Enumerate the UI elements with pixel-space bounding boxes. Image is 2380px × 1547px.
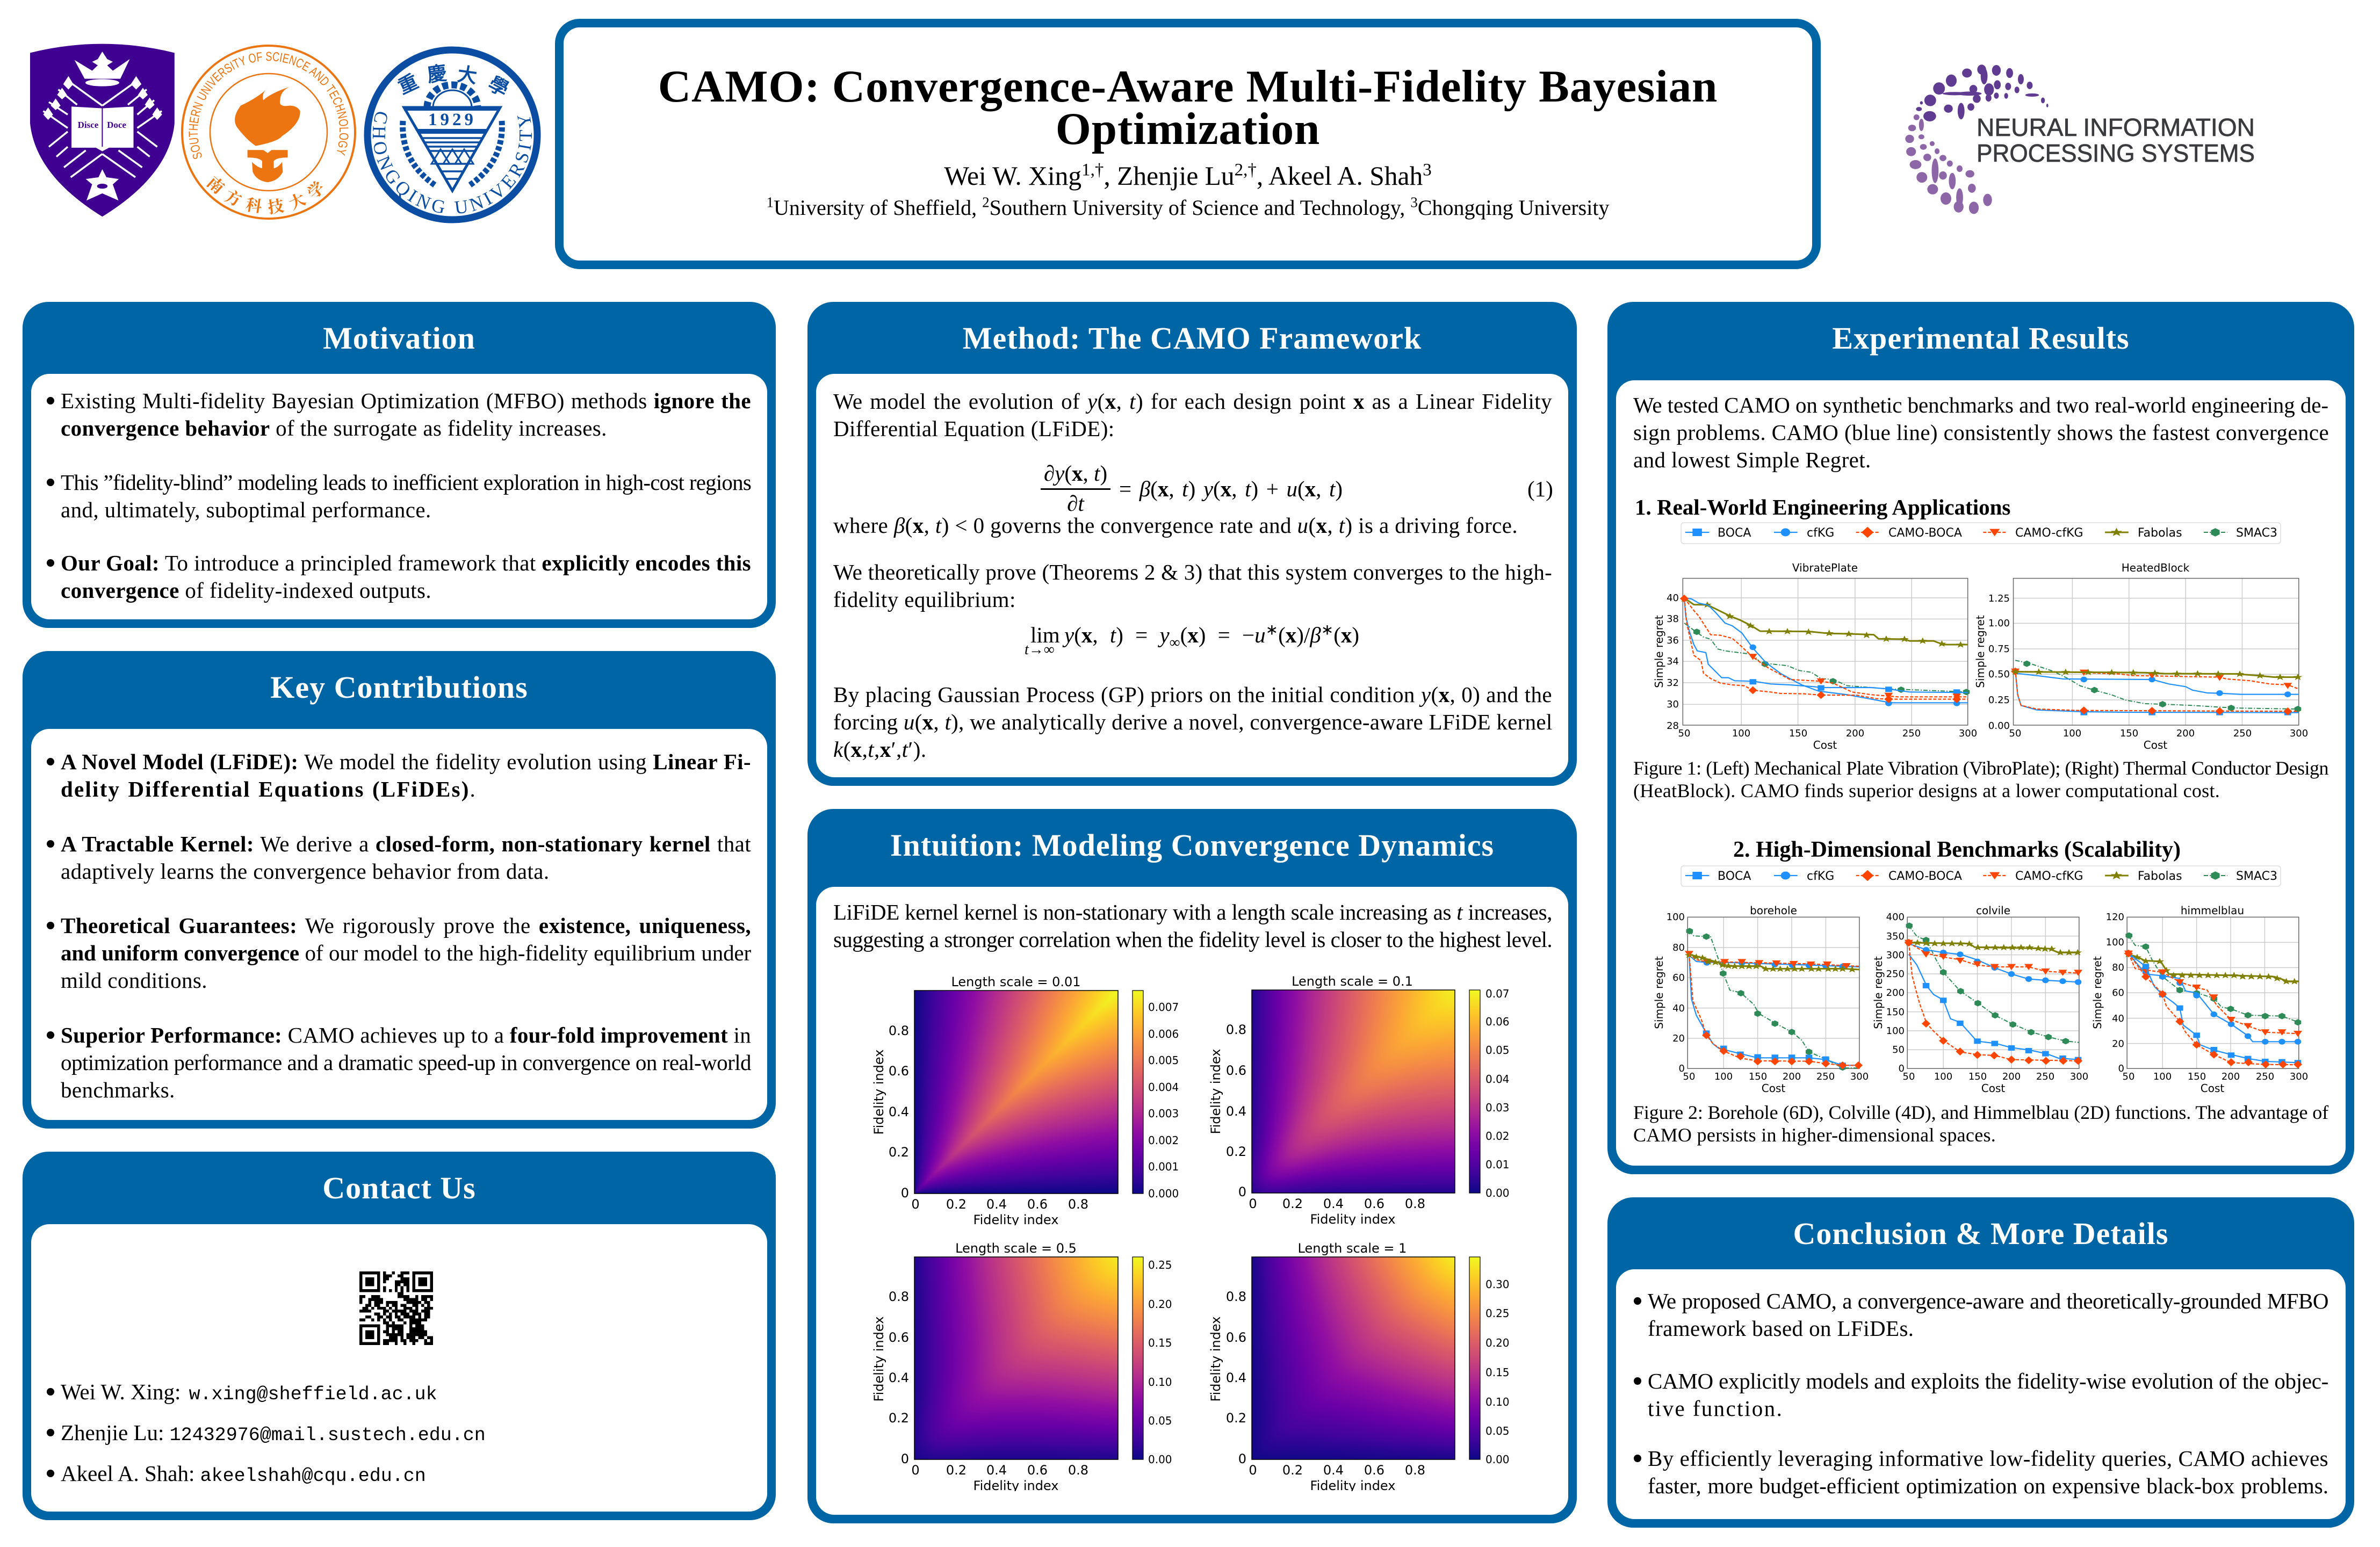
heatmap: length scale 0.5: Fidelity index — [973, 1478, 1058, 1493]
text: tractable kernel: adaptively learns the convergence behavior from data. — [61, 859, 550, 884]
text: our goal: convergence of fidelity-indexed outputs. — [61, 578, 431, 603]
chart: HeatedBlock — [1974, 561, 2308, 751]
heatmap: length scale 0.5: 0 — [911, 1463, 920, 1478]
text: Zhenjie Lu: Zhenjie Lu: 12432976@mail.sustech.edu.cn — [61, 1420, 486, 1446]
chart: VibratePlate: 150 — [1789, 728, 1807, 739]
heatmap: length scale 0.01 — [874, 977, 1179, 1225]
text: kernel intuition — [833, 899, 1552, 953]
heatmap: length scale 0.5: Fidelity index — [871, 1317, 886, 1401]
heatmap: length scale 0.5: 0.4 — [986, 1463, 1007, 1478]
title: CAMO: Convergence-Aware Multi-Fidelity Bayesian — [658, 61, 1718, 112]
legend: CAMO-BOCA — [1888, 526, 1962, 540]
heatmap: length scale 1: Fidelity index — [1310, 1478, 1395, 1493]
heatmap: length scale 0.1: 0.03 — [1485, 1101, 1510, 1114]
chart: colvile: 150 — [1968, 1071, 1987, 1082]
chart: figure 2 — [1617, 859, 2348, 1096]
heatmap: length scale 0.5: 0.10 — [1148, 1376, 1172, 1389]
chart: VibratePlate: 32 — [1667, 677, 1679, 689]
chart: HeatedBlock: Simple regret — [1974, 615, 1987, 688]
chart: borehole: 150 — [1749, 1071, 1767, 1082]
chart: colvile: 200 — [2002, 1071, 2021, 1082]
heatmap: length scale 0.5: 0.8 — [1068, 1463, 1088, 1478]
chart: himmelblau: himmelblau — [2181, 904, 2244, 917]
chart: himmelblau: 20 — [2112, 1038, 2124, 1050]
equation 1: (1) — [1527, 476, 1553, 501]
heatmap: length scale 0.1: 0 — [1249, 1196, 1257, 1211]
heatmap: length scale 0.1: 0.05 — [1485, 1044, 1510, 1057]
heatmap: length scale 0.1: 0.4 — [1226, 1104, 1246, 1119]
chart: VibratePlate: 200 — [1846, 728, 1864, 739]
chart: heatmap grid — [871, 974, 1510, 1493]
heatmap: length scale 0.5: 0.2 — [946, 1463, 967, 1478]
chart: colvile: 50 — [1903, 1071, 1915, 1082]
chart: himmelblau: 80 — [2112, 962, 2124, 973]
heading: conclusion: Conclusion & More Details — [1793, 1216, 2168, 1251]
logo: Southern University of Science and Technology: SOUTHERN UNIVERSITY OF SCIENCE AND TECHNOLOGY — [189, 52, 348, 159]
text: gaussian process: k(x,t,x′,t′). — [833, 737, 926, 762]
caption: figure 2: Figure 2: Borehole (6D), Colville (4D), and Himmelblau (2D) functions. The advantage of — [1633, 1102, 2328, 1123]
text: novel model — [47, 749, 751, 801]
chart: colvile: 300 — [1886, 950, 1905, 961]
text: novel model: delity Differential Equations (LFiDEs). — [61, 777, 477, 801]
chart: himmelblau: 200 — [2222, 1071, 2240, 1082]
chart: HeatedBlock: 1.00 — [1988, 618, 2010, 629]
chart: himmelblau: 60 — [2112, 987, 2124, 999]
chart: colvile: 200 — [1886, 987, 1905, 999]
heatmap: length scale 0.1: 0.4 — [1323, 1196, 1344, 1211]
chart: borehole: 20 — [1672, 1033, 1685, 1044]
text: efficiently leveraging: faster, more budget-efficient optimization on expensive black-box problems. — [1648, 1473, 2328, 1498]
heatmap: length scale 0.5: 0 — [901, 1451, 909, 1466]
text: efficiently leveraging — [1648, 1445, 2328, 1500]
heatmap: length scale 0.01: 0.000 — [1148, 1187, 1179, 1200]
chart: borehole: 200 — [1783, 1071, 1801, 1082]
text: proposed CAMO: framework based on LFiDEs. — [1648, 1316, 1914, 1341]
heatmap: length scale 0.01: 0.006 — [1148, 1028, 1179, 1040]
heatmap: length scale 0.01: 0.003 — [1148, 1107, 1179, 1120]
heatmap: length scale 0.1: 0 — [1238, 1184, 1246, 1199]
heading: method: Method: The CAMO Framework — [963, 321, 1422, 356]
chart: colvile: Simple regret — [1872, 956, 1885, 1029]
heatmap: length scale 0.01: Length scale = 0.01 — [951, 974, 1081, 989]
chart: VibratePlate: 300 — [1959, 728, 1977, 739]
logo: Chongqing University: CHONGQING UNIVERSITY — [373, 112, 532, 214]
heatmap: length scale 1: 0.30 — [1485, 1278, 1510, 1291]
chart: himmelblau: Simple regret — [2091, 956, 2104, 1029]
caption: figure 2: CAMO persists in higher-dimensional spaces. — [1633, 1124, 1996, 1146]
text: Akeel A. Shah: Akeel A. Shah: akeelshah@cqu.edu.cn — [61, 1461, 426, 1487]
heatmap: length scale 1 — [1210, 1243, 1509, 1491]
chart: HeatedBlock: 1.25 — [1988, 593, 2010, 604]
text: kernel intuition: suggesting a stronger correlation when the fidelity level is closer to the highest level. — [833, 927, 1552, 952]
chart: borehole: 60 — [1672, 972, 1685, 984]
heatmap: length scale 1: 0.8 — [1405, 1463, 1425, 1478]
heatmap: length scale 0.1: Length scale = 0.1 — [1292, 974, 1413, 989]
chart: HeatedBlock: 300 — [2290, 728, 2308, 739]
text: proposed CAMO: We proposed CAMO, a convergence-aware and theoretically-grounded MFBO — [1648, 1289, 2328, 1313]
icon: QR code — [359, 1271, 433, 1345]
heatmap: length scale 1: Fidelity index — [1208, 1317, 1223, 1401]
heading: motivation: Motivation — [323, 321, 475, 356]
legend: CAMO-BOCA — [1888, 870, 1962, 883]
heatmap: length scale 0.1: 0.01 — [1485, 1158, 1510, 1171]
logo: Chongqing University: 慶 — [426, 62, 448, 86]
chart: HeatedBlock: 50 — [2009, 728, 2021, 739]
panel: key contributions — [23, 651, 776, 1129]
title: Optimization — [1056, 104, 1320, 154]
heatmap: length scale 0.1 — [1210, 975, 1509, 1225]
chart: borehole: 300 — [1850, 1071, 1869, 1082]
text: where beta: where β(x, t) < 0 governs the convergence rate and u(x, t) is a driving force. — [833, 513, 1518, 538]
chart: VibratePlate — [1653, 561, 1977, 751]
chart: VibratePlate: 250 — [1902, 728, 1921, 739]
heatmap: length scale 1: 0.05 — [1485, 1425, 1510, 1437]
logo: University of Sheffield shield: Doce — [107, 120, 126, 130]
text: existing methods: Existing Multi-fidelity Bayesian Optimization (MFBO) methods ignore the — [61, 388, 751, 413]
chart: colvile: 150 — [1886, 1007, 1905, 1018]
caption: figure 1: (HeatBlock). CAMO finds superior designs at a lower computational cost. — [1633, 780, 2220, 801]
caption: figure 2 — [1633, 1101, 2328, 1146]
heatmap: length scale 0.5: 0.15 — [1148, 1336, 1172, 1349]
heatmap: length scale 0.01: 0.002 — [1148, 1134, 1179, 1147]
heatmap: length scale 0.01: Fidelity index — [871, 1050, 886, 1134]
text: gaussian process: forcing u(x, t), we analytically derive a novel, convergence-aware LFiDE kernel — [833, 710, 1553, 734]
chart: HeatedBlock: HeatedBlock — [2122, 561, 2190, 574]
heatmap: length scale 1: 0.6 — [1364, 1463, 1384, 1478]
chart: himmelblau: 100 — [2153, 1071, 2172, 1082]
text: model intro: Differential Equation (LFiDE): — [833, 416, 1115, 441]
chart: colvile: 100 — [1934, 1071, 1952, 1082]
chart: borehole: 250 — [1816, 1071, 1835, 1082]
chart: himmelblau: 50 — [2123, 1071, 2134, 1082]
text: theoretical guarantees: Theoretical Guarantees: We rigorously prove the existence, uniqueness, — [61, 913, 751, 938]
chart: HeatedBlock: 0.25 — [1988, 695, 2010, 706]
legend — [1681, 866, 2281, 886]
heading: key contributions: Key Contributions — [270, 670, 528, 705]
heatmap: length scale 0.01: 0.007 — [1148, 1001, 1179, 1014]
text: superior performance — [61, 1022, 751, 1104]
chart: HeatedBlock: 0.50 — [1988, 669, 2010, 680]
text: explicitly models — [1648, 1368, 2328, 1422]
heatmap: length scale 0.1: 0.8 — [1226, 1022, 1246, 1037]
chart: colvile — [1872, 904, 2088, 1095]
heatmap: length scale 0.01: 0.2 — [946, 1197, 967, 1212]
heatmap: length scale 0.01: 0.2 — [889, 1145, 909, 1160]
chart: HeatedBlock: 100 — [2063, 728, 2081, 739]
heatmap: length scale 1: 0.8 — [1226, 1289, 1246, 1304]
equation 2: lim — [1030, 623, 1060, 647]
text: existing methods: convergence behavior of the surrogate as fidelity increases. — [61, 416, 607, 440]
logo: Neural Information Processing Systems — [1905, 64, 2255, 214]
text: existing methods — [47, 388, 751, 440]
chart: borehole: Cost — [1762, 1082, 1785, 1095]
chart: colvile: 100 — [1886, 1025, 1905, 1037]
text: superior performance: benchmarks. — [61, 1078, 175, 1102]
equation 2: y(x, t) = y∞(x) = −u∗(x)/β∗(x) — [1064, 621, 1359, 651]
chart: borehole: Simple regret — [1653, 956, 1665, 1029]
chart: HeatedBlock: 250 — [2233, 728, 2252, 739]
legend: Fabolas — [2138, 870, 2182, 883]
chart: borehole — [1653, 904, 1869, 1095]
equation 1: ∂t — [1067, 491, 1084, 516]
chart: himmelblau: 0 — [2118, 1063, 2124, 1074]
legend: CAMO-cfKG — [2015, 526, 2083, 540]
heading: high-dimensional benchmarks: 2. High-Dimensional Benchmarks (Scalability) — [1733, 837, 2181, 862]
text: results intro: We tested CAMO on synthetic benchmarks and two real-world engineering de- — [1633, 393, 2328, 417]
chart: VibratePlate: Simple regret — [1653, 615, 1665, 688]
affiliations: 1University of Sheffield, 2Southern University of Science and Technology, 3Chongqing University — [767, 194, 1609, 220]
chart: colvile: 300 — [2070, 1071, 2088, 1082]
heatmap: length scale 1: 0 — [1238, 1451, 1246, 1466]
legend: BOCA — [1718, 870, 1751, 883]
heatmap: length scale 0.1: 0.07 — [1485, 987, 1510, 1000]
text: theoretical guarantees: and uniform convergence of our model to the high-fidelity equilibrium under — [61, 941, 751, 965]
legend: BOCA — [1718, 526, 1751, 540]
text: model intro: We model the evolution of y(x, t) for each design point x as a Linear Fidelity — [833, 389, 1552, 414]
chart: VibratePlate: 28 — [1667, 720, 1679, 732]
heatmap: length scale 0.01: 0.4 — [889, 1104, 909, 1119]
panel: contact us — [23, 1152, 776, 1520]
text: gaussian process: By placing Gaussian Process (GP) priors on the initial condition y(x, 0) and the — [833, 682, 1552, 707]
chart: colvile: Cost — [1981, 1082, 2005, 1095]
chart: VibratePlate: 30 — [1667, 699, 1679, 710]
text: results intro: and lowest Simple Regret. — [1633, 447, 1871, 472]
text: our goal: Our Goal: To introduce a principled framework that explicitly encodes this — [61, 551, 751, 575]
heatmap: length scale 0.01: 0.4 — [986, 1197, 1007, 1212]
chart: himmelblau: Cost — [2201, 1082, 2224, 1095]
heatmap: length scale 0.5: 0.05 — [1148, 1414, 1172, 1427]
logo: Southern University of Science and Technology: 南方科技大学 — [206, 176, 323, 215]
logo: University of Sheffield shield: Disce — [78, 120, 99, 130]
heatmap: length scale 0.5: 0.8 — [889, 1289, 909, 1304]
chart: HeatedBlock: 200 — [2176, 728, 2195, 739]
heatmap: length scale 0.1: 0.6 — [1226, 1063, 1246, 1078]
heatmap: length scale 0.5: 0.6 — [1027, 1463, 1048, 1478]
logo: Neural Information Processing Systems: NEURAL INFORMATION — [1977, 113, 2255, 141]
chart: HeatedBlock: 0.00 — [1988, 720, 2010, 732]
legend: CAMO-cfKG — [2015, 870, 2083, 883]
heatmap: length scale 0.5: 0.25 — [1148, 1259, 1172, 1271]
chart: VibratePlate: Cost — [1813, 739, 1837, 751]
heatmap: length scale 1: 0.10 — [1485, 1396, 1510, 1408]
heatmap: length scale 1: 0.2 — [1282, 1463, 1303, 1478]
equation 2: t→∞ — [1025, 641, 1055, 658]
panel: conclusion — [1607, 1197, 2354, 1528]
heading: intuition: Intuition: Modeling Convergence Dynamics — [890, 828, 1494, 863]
chart: borehole: 40 — [1672, 1003, 1685, 1014]
heatmap: length scale 0.5: 0.00 — [1148, 1453, 1172, 1466]
chart: borehole: 50 — [1683, 1071, 1695, 1082]
heatmap: length scale 0.1: 0.04 — [1485, 1073, 1510, 1086]
heatmap: length scale 0.01: 0.005 — [1148, 1054, 1179, 1067]
legend: Fabolas — [2138, 526, 2182, 540]
heading: contact us: Contact Us — [322, 1170, 476, 1205]
caption: figure 1: Figure 1: (Left) Mechanical Plate Vibration (VibroPlate); (Right) Thermal Conductor Design — [1633, 757, 2328, 779]
text: Wei W. Xing: Wei W. Xing: w.xing@sheffield.ac.uk — [61, 1379, 437, 1405]
heatmap: length scale 0.1: 0.02 — [1485, 1130, 1510, 1143]
heatmap: length scale 0.01: 0.001 — [1148, 1160, 1179, 1173]
heatmap: length scale 0.1: 0.2 — [1226, 1144, 1246, 1159]
equation 1 — [1041, 460, 1551, 517]
text: superior performance: optimization performance and a dramatic speed-up in convergence on real-world — [61, 1050, 751, 1075]
chart: figure 1 — [1617, 516, 2348, 752]
panel: motivation — [23, 302, 776, 628]
chart: colvile: 350 — [1886, 931, 1905, 942]
panel: experimental results — [1607, 302, 2354, 1174]
text: Zhenjie Lu — [61, 1419, 751, 1449]
chart: himmelblau: 300 — [2290, 1071, 2308, 1082]
logo: Chongqing University: 學 — [485, 73, 512, 101]
heatmap: length scale 0.1: 0.00 — [1485, 1187, 1510, 1199]
text: explicitly models: CAMO explicitly models and exploits the fidelity-wise evolution of the objec- — [1648, 1369, 2328, 1393]
equation 1: = β(x, t) y(x, t) + u(x, t) — [1119, 476, 1343, 501]
chart: borehole: borehole — [1750, 904, 1797, 917]
heatmap: length scale 0.01: 0.004 — [1148, 1081, 1179, 1094]
heatmap: length scale 0.1: 0.6 — [1364, 1196, 1384, 1211]
text: proposed CAMO — [1648, 1288, 2328, 1342]
chart: himmelblau: 150 — [2188, 1071, 2206, 1082]
text: Akeel A. Shah — [61, 1460, 751, 1490]
chart: VibratePlate: 50 — [1678, 728, 1690, 739]
title box — [555, 19, 1821, 269]
chart: HeatedBlock: Cost — [2144, 739, 2167, 751]
title — [658, 61, 1718, 154]
heatmap: length scale 0.01: 0.6 — [889, 1064, 909, 1079]
text: tractable kernel: A Tractable Kernel: We derive a closed-form, non-stationary kernel that — [61, 832, 751, 856]
heatmap: length scale 0.5: 0.4 — [889, 1370, 909, 1385]
text: efficiently leveraging: By efficiently leveraging informative low-fidelity queries, CAMO achieves — [1648, 1446, 2328, 1471]
chart: HeatedBlock: 0.75 — [1988, 644, 2010, 655]
legend: cfKG — [1807, 870, 1834, 883]
text: gaussian process — [833, 681, 1552, 763]
heatmap: length scale 0.1: Fidelity index — [1310, 1212, 1395, 1227]
logo: Chongqing University: 1929 — [428, 110, 477, 129]
chart: borehole: 100 — [1714, 1071, 1733, 1082]
heatmap: length scale 1: 0.00 — [1485, 1453, 1510, 1466]
chart: colvile: 50 — [1892, 1044, 1905, 1056]
heatmap: length scale 1: 0.20 — [1485, 1336, 1510, 1349]
heatmap: length scale 1: 0.6 — [1226, 1330, 1246, 1345]
text: theoretical guarantees — [47, 913, 751, 993]
text: results intro — [1633, 392, 2328, 474]
chart: himmelblau: 100 — [2106, 937, 2124, 948]
chart: VibratePlate: 100 — [1732, 728, 1750, 739]
chart: himmelblau: 120 — [2106, 912, 2124, 923]
chart: borehole: 80 — [1672, 942, 1685, 953]
equation 1: ∂y(x, t) — [1044, 461, 1107, 486]
logo: University of Sheffield shield — [30, 44, 175, 217]
text: fidelity-blind: This ”fidelity-blind” modeling leads to inefficient exploration in high-cost regions — [61, 470, 751, 495]
heatmap: length scale 0.01: Fidelity index — [973, 1212, 1058, 1227]
text: tractable kernel — [47, 832, 751, 884]
heatmap: length scale 0.01: 0 — [911, 1197, 920, 1212]
heatmap: length scale 0.5: 0.20 — [1148, 1298, 1172, 1311]
heatmap: length scale 0.5: 0.2 — [889, 1411, 909, 1426]
logo: Southern University of Science and Technology — [181, 45, 356, 220]
chart: borehole: 0 — [1679, 1063, 1685, 1074]
heatmap: length scale 1: Length scale = 1 — [1298, 1241, 1407, 1256]
chart: VibratePlate: 36 — [1667, 635, 1679, 646]
text: results intro: sign problems. CAMO (blue line) consistently shows the fastest convergence — [1633, 420, 2329, 445]
chart: colvile: 250 — [2036, 1071, 2054, 1082]
text: superior performance: Superior Performance: CAMO achieves up to a four-fold improvement in — [61, 1023, 751, 1047]
text: theorem — [833, 559, 1552, 613]
heatmap: length scale 0.01: 0.8 — [1068, 1197, 1088, 1212]
heading: real-world applications: 1. Real-World Engineering Applications — [1635, 495, 2010, 519]
legend: cfKG — [1807, 526, 1834, 540]
chart: colvile: 400 — [1886, 912, 1905, 923]
heatmap: length scale 1: 0.25 — [1485, 1307, 1510, 1320]
heatmap: length scale 1: 0.2 — [1226, 1411, 1246, 1426]
legend: SMAC3 — [2236, 526, 2277, 540]
text: fidelity-blind: and, ultimately, suboptimal performance. — [61, 497, 431, 522]
logo: Chongqing University: 重 — [395, 70, 422, 99]
heatmap: length scale 0.5: 0.6 — [889, 1330, 909, 1345]
legend — [1681, 523, 2281, 544]
panel: intuition — [807, 809, 1577, 1523]
caption: figure 1 — [1633, 757, 2328, 802]
text: novel model: A Novel Model (LFiDE): We model the fidelity evolution using Linear Fi- — [61, 749, 751, 774]
heatmap: length scale 0.5 — [874, 1243, 1171, 1491]
heading: experimental results: Experimental Results — [1832, 321, 2130, 356]
heatmap: length scale 0.01: 0 — [901, 1185, 909, 1201]
heatmap: length scale 0.01: 0.6 — [1027, 1197, 1048, 1212]
text: kernel intuition: LiFiDE kernel kernel is non-stationary with a length scale increasing as t increases, — [833, 900, 1552, 924]
text: model intro — [833, 388, 1552, 443]
heatmap: length scale 0.01: 0.8 — [889, 1023, 909, 1038]
chart: VibratePlate: 38 — [1667, 613, 1679, 625]
chart: VibratePlate: 40 — [1667, 592, 1679, 604]
heatmap: length scale 0.1: 0.06 — [1485, 1015, 1510, 1028]
chart: himmelblau: 40 — [2112, 1013, 2124, 1024]
heatmap: length scale 1: 0.4 — [1226, 1370, 1246, 1385]
heatmap: length scale 0.1: 0.2 — [1282, 1196, 1303, 1211]
heatmap: length scale 0.1: 0.8 — [1405, 1196, 1425, 1211]
text: fidelity-blind — [47, 470, 751, 522]
text: theorem: We theoretically prove (Theorems 2 & 3) that this system converges to the high- — [833, 560, 1552, 584]
legend: SMAC3 — [2236, 870, 2277, 883]
logo: Chongqing University — [364, 46, 540, 223]
text: explicitly models: tive function. — [1648, 1396, 1783, 1421]
chart: HeatedBlock: 150 — [2120, 728, 2138, 739]
chart: VibratePlate: 34 — [1667, 656, 1679, 667]
logo: Neural Information Processing Systems: PROCESSING SYSTEMS — [1977, 139, 2255, 167]
chart: himmelblau: 250 — [2256, 1071, 2274, 1082]
chart: VibratePlate: VibratePlate — [1792, 561, 1858, 574]
heatmap: length scale 0.1: Fidelity index — [1208, 1049, 1223, 1134]
chart: colvile: 250 — [1886, 968, 1905, 980]
text: theorem: fidelity equilibrium: — [833, 587, 1016, 612]
text: Wei W. Xing — [61, 1378, 751, 1408]
chart: colvile: 0 — [1899, 1063, 1905, 1074]
heatmap: length scale 1: 0.4 — [1323, 1463, 1344, 1478]
panel: method — [807, 302, 1577, 786]
heatmap: length scale 1: 0.15 — [1485, 1366, 1510, 1379]
text: our goal — [47, 551, 751, 603]
authors: Wei W. Xing1,†, Zhenjie Lu2,†, Akeel A. Shah3 — [944, 160, 1432, 191]
heatmap: length scale 1: 0 — [1249, 1463, 1257, 1478]
text: theoretical guarantees: mild conditions. — [61, 968, 207, 993]
chart: himmelblau — [2091, 904, 2308, 1095]
logo: Chongqing University: 大 — [456, 63, 478, 88]
chart: colvile: colvile — [1976, 904, 2010, 917]
chart: borehole: 100 — [1667, 912, 1685, 923]
heatmap: length scale 0.5: Length scale = 0.5 — [955, 1241, 1077, 1256]
